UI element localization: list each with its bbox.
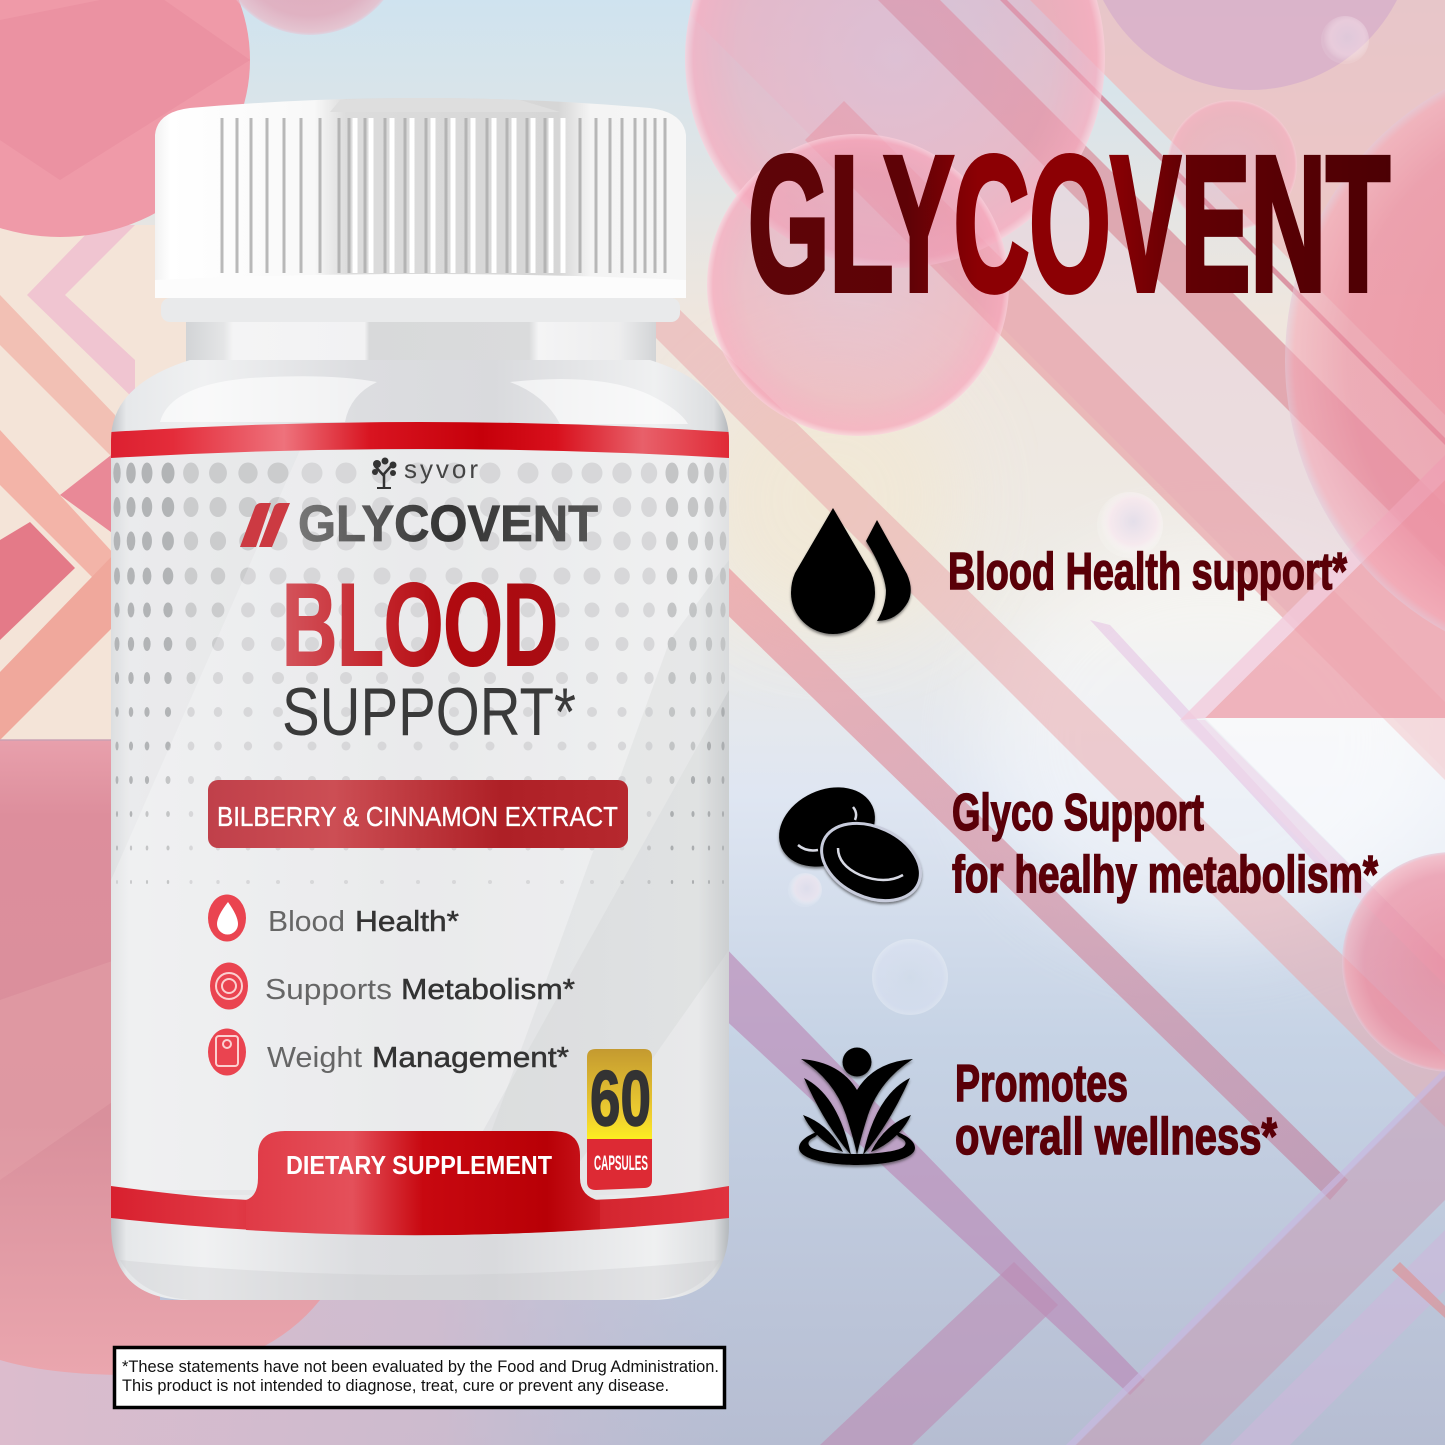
benefit: blood health: Health* bbox=[355, 906, 459, 938]
disclaimer box: This product is not intended to diagnose, treat, cure or prevent any disease. bbox=[122, 1377, 669, 1395]
brand syvor: syvor bbox=[404, 454, 478, 484]
icon: blood drops bbox=[791, 508, 911, 634]
top red band bbox=[111, 422, 729, 458]
benefit: metabolism: Metabolism* bbox=[401, 974, 575, 1006]
diagonal pink bands right bbox=[600, 0, 1445, 1445]
bottle body bbox=[111, 360, 729, 1300]
text: overall wellness bbox=[955, 1055, 1278, 1166]
brand logo mark bbox=[240, 503, 290, 547]
brand name: GLYCOVENT bbox=[298, 495, 598, 552]
benefit: weight bbox=[208, 1028, 569, 1076]
60 capsules badge: 60 bbox=[590, 1054, 651, 1142]
bottom red band bbox=[111, 1186, 729, 1235]
blood heading: BLOOD bbox=[282, 559, 558, 690]
bottle neck bbox=[161, 298, 680, 370]
dietary supplement tab bbox=[246, 1131, 600, 1235]
dietary supplement tab: DIETARY SUPPLEMENT bbox=[286, 1150, 552, 1180]
shoulder gloss bbox=[160, 376, 688, 424]
support heading: SUPPORT* bbox=[282, 674, 576, 750]
text: overall wellness: overall wellness* bbox=[955, 1108, 1278, 1166]
text: glyco support bbox=[952, 784, 1379, 904]
disclaimer box: *These statements have not been evaluated by the Food and Drug Administration. bbox=[122, 1358, 719, 1376]
ingredient banner bbox=[208, 780, 628, 848]
icon: wellness figure bbox=[799, 1048, 915, 1165]
60 capsules badge: CAPSULES bbox=[594, 1152, 648, 1175]
label dots bbox=[113, 462, 727, 884]
disclaimer box bbox=[114, 1348, 724, 1408]
icon: red blood cells bbox=[766, 772, 933, 916]
benefit: blood health bbox=[208, 894, 459, 942]
60 capsules badge bbox=[587, 1049, 652, 1190]
text: overall wellness: Promotes bbox=[955, 1055, 1128, 1113]
cap ribs side bbox=[222, 118, 665, 273]
bottle cap bbox=[155, 98, 686, 298]
label sheen bbox=[111, 450, 729, 1190]
bubbles bbox=[0, 0, 1445, 1072]
product bottle bbox=[111, 98, 729, 1300]
benefit: metabolism: Supports bbox=[265, 974, 392, 1006]
bottle label bbox=[111, 422, 729, 1235]
benefit: weight: Weight bbox=[267, 1042, 362, 1074]
benefit: weight: Management* bbox=[372, 1042, 569, 1074]
text: glyco support: Glyco Support bbox=[952, 784, 1204, 842]
bottle base shading bbox=[120, 1260, 720, 1300]
ingredient banner: BILBERRY & CINNAMON EXTRACT bbox=[217, 801, 618, 832]
cap ribs centre bbox=[355, 118, 563, 273]
brand syvor bbox=[372, 454, 478, 489]
benefit: metabolism bbox=[210, 962, 575, 1010]
diagonal pink bands left bbox=[0, 225, 730, 1445]
benefit: blood health: Blood bbox=[268, 906, 345, 938]
